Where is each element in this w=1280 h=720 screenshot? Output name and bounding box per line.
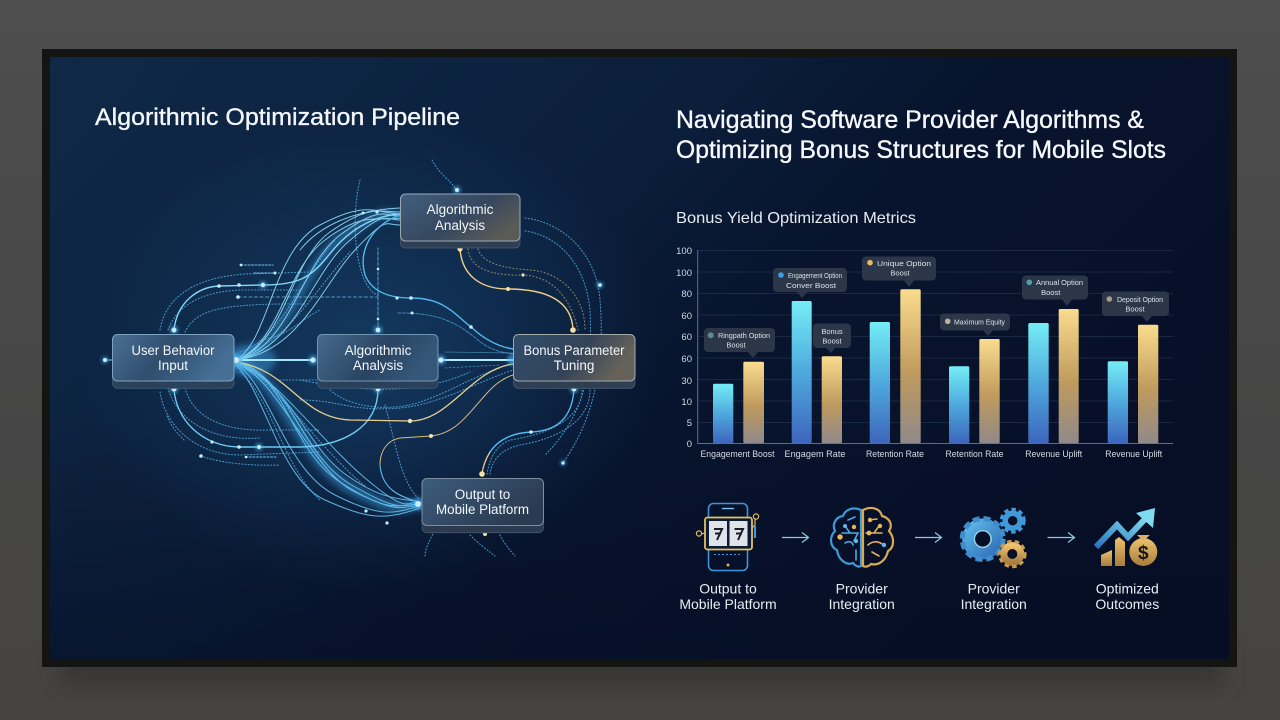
x axis labels: Retention Rate bbox=[946, 449, 1004, 460]
label: optimized outcomes: Optimized bbox=[1096, 580, 1159, 596]
node: bonus parameter tuning: Bonus Parameter bbox=[524, 343, 625, 358]
label: optimized outcomes bbox=[1095, 580, 1159, 612]
secondary blue curve bbox=[398, 313, 513, 354]
node: algorithmic analysis top: Algorithmic bbox=[427, 202, 494, 217]
callout 4: Unique Option bbox=[877, 259, 931, 268]
vertical link bbox=[377, 248, 379, 330]
callout 7 bbox=[1102, 292, 1169, 322]
arrow 3 bbox=[1048, 532, 1074, 542]
beams bbox=[236, 356, 313, 364]
callout 4 bbox=[862, 256, 936, 287]
icon: growth chart with coin bbox=[1096, 508, 1157, 566]
label: optimized outcomes: Outcomes bbox=[1095, 596, 1159, 612]
network nodes: glowing dots bbox=[102, 186, 604, 536]
callout 6: Boost bbox=[1041, 288, 1061, 297]
node: algorithmic analysis centre bbox=[318, 334, 438, 388]
label: provider integration 1: Integration bbox=[829, 596, 895, 612]
arrow 2 bbox=[915, 532, 942, 542]
main heading bbox=[676, 106, 1166, 164]
dotted link across top bbox=[238, 296, 378, 298]
bars: gold series bbox=[743, 289, 1158, 443]
fan to output node bbox=[236, 361, 420, 516]
y axis labels: 5 bbox=[687, 418, 692, 429]
y axis labels: 60 bbox=[681, 354, 692, 365]
callout 2: Conver Boost bbox=[786, 281, 837, 290]
glow under fans bbox=[224, 344, 276, 376]
x axis labels: Revenue Uplift bbox=[1105, 449, 1163, 460]
y axis labels: 10 bbox=[681, 397, 692, 408]
user input upper arc bbox=[174, 214, 400, 330]
y axis labels bbox=[676, 246, 692, 450]
callout 5: Maximum Equity bbox=[954, 318, 1005, 326]
callout 1: Ringpath Option bbox=[718, 331, 770, 340]
x axis labels: Engagem Rate bbox=[784, 449, 846, 460]
callout 1 bbox=[704, 328, 775, 358]
gold curve top node to bonus bbox=[460, 249, 573, 330]
icon: gears bbox=[962, 509, 1025, 567]
node: algorithmic analysis top: Analysis bbox=[435, 218, 485, 233]
label: provider integration 2 bbox=[961, 580, 1027, 612]
node: user behavior input: Input bbox=[158, 358, 188, 373]
main heading: Optimizing Bonus Structures for Mobile Slots bbox=[676, 136, 1166, 164]
label: provider integration 1: Provider bbox=[836, 580, 888, 596]
y axis labels: 100 bbox=[676, 246, 692, 257]
top node to bonus blue curve bbox=[363, 215, 513, 349]
x axis labels bbox=[700, 449, 1163, 460]
node: bonus parameter tuning: Tuning bbox=[554, 358, 594, 373]
pipeline network bbox=[105, 160, 601, 556]
callout 6 bbox=[1022, 276, 1088, 306]
wall shadow under monitor bbox=[60, 645, 1225, 687]
arrow 1 bbox=[782, 532, 808, 542]
title: pipeline: Algorithmic Optimization Pipeline bbox=[95, 104, 460, 131]
label: output to mobile platform: Mobile Platform bbox=[679, 596, 777, 612]
icon: growth chart with coin: $ bbox=[1138, 543, 1149, 564]
node: user behavior input bbox=[112, 334, 234, 388]
node: output to mobile platform bbox=[422, 478, 544, 533]
label: provider integration 1 bbox=[829, 580, 895, 612]
bar chart bbox=[676, 246, 1173, 460]
icon: brain bbox=[831, 508, 893, 567]
callout 2: Engagement Option bbox=[788, 271, 842, 280]
callout 5 bbox=[940, 314, 1010, 336]
callout 3: Boost bbox=[822, 336, 843, 346]
fan to top node bbox=[236, 208, 400, 360]
main heading: Navigating Software Provider Algorithms & bbox=[676, 106, 1144, 134]
y axis labels: 60 bbox=[681, 311, 692, 322]
node: algorithmic analysis centre: Algorithmic bbox=[345, 343, 412, 358]
y axis labels: 60 bbox=[681, 332, 692, 343]
chart heading: Bonus Yield Optimization Metrics bbox=[676, 210, 916, 227]
x axis labels: Engagement Boost bbox=[700, 449, 775, 460]
x axis labels: Revenue Uplift bbox=[1025, 449, 1083, 460]
label: output to mobile platform: Output to bbox=[699, 580, 757, 596]
callout 1: Boost bbox=[726, 340, 747, 350]
label: output to mobile platform bbox=[679, 580, 777, 612]
y axis labels: 100 bbox=[676, 268, 692, 279]
short dash lines bbox=[241, 264, 273, 266]
node: algorithmic analysis top bbox=[400, 194, 520, 248]
node: output to mobile platform: Output to bbox=[455, 487, 510, 502]
callout 7: Deposit Option bbox=[1117, 295, 1163, 304]
callout 7: Boost bbox=[1125, 304, 1146, 314]
callout 2 bbox=[773, 268, 847, 298]
y axis labels: 0 bbox=[687, 439, 692, 450]
callout 3 bbox=[813, 324, 851, 353]
gold curve through centre bbox=[236, 362, 513, 421]
label: provider integration 2: Integration bbox=[961, 596, 1027, 612]
bars: cyan series bbox=[713, 301, 1128, 443]
screen bbox=[50, 57, 1229, 659]
bonus to output curve bbox=[490, 389, 574, 452]
node: algorithmic analysis centre: Analysis bbox=[353, 358, 403, 373]
user input lower arc bbox=[174, 389, 378, 447]
callout 4: Boost bbox=[890, 268, 911, 278]
callout 6: Annual Option bbox=[1036, 278, 1083, 287]
icon: mobile slot machine bbox=[696, 504, 759, 570]
dotted halo curves bbox=[160, 160, 601, 556]
node: output to mobile platform: Mobile Platform bbox=[436, 502, 529, 517]
node: user behavior input: User Behavior bbox=[132, 343, 215, 358]
y axis labels: 80 bbox=[681, 289, 692, 300]
y axis labels: 30 bbox=[681, 376, 692, 387]
x axis labels: Retention Rate bbox=[866, 449, 924, 460]
node: bonus parameter tuning bbox=[514, 334, 635, 388]
thin gold curve lower bbox=[380, 375, 513, 465]
label: provider integration 2: Provider bbox=[968, 580, 1020, 596]
callout 3: Bonus bbox=[821, 327, 843, 336]
